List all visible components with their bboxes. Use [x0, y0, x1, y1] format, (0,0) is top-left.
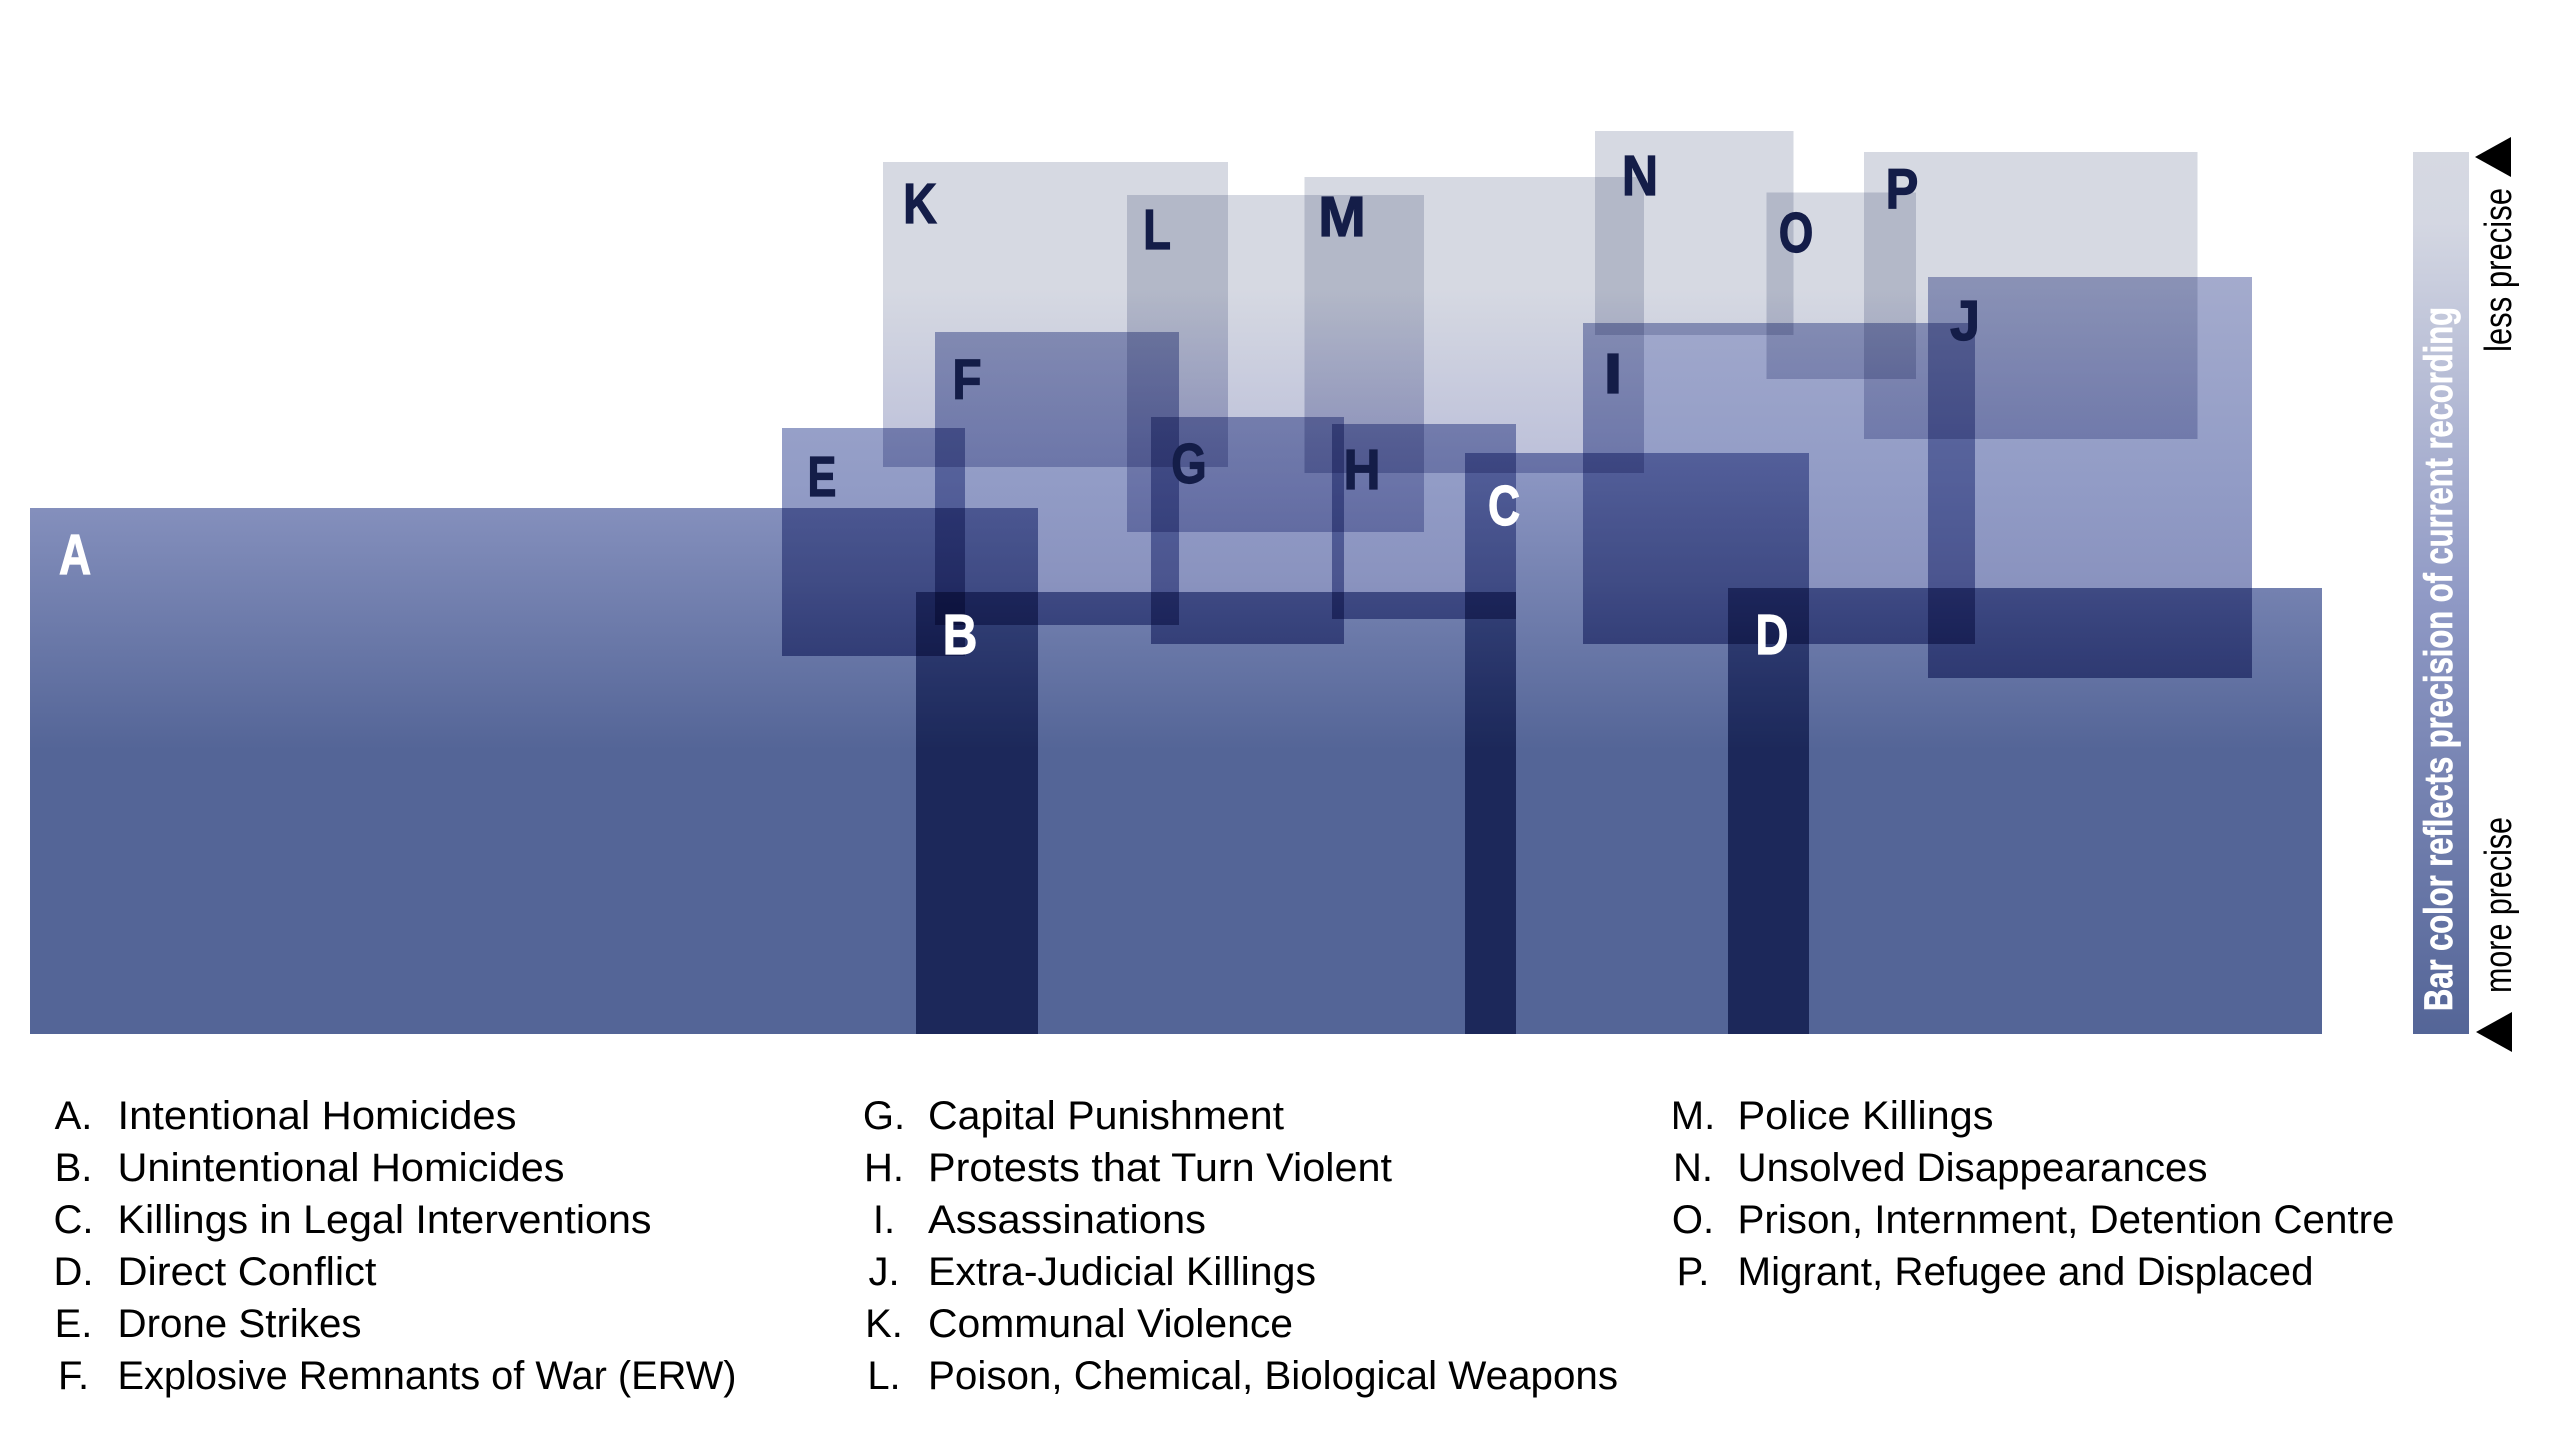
label C: C	[1488, 474, 1520, 537]
legend I: Assassinations	[928, 1198, 1206, 1242]
legend O: Prison, Internment, Detention Centre	[1738, 1198, 2394, 1242]
legend N: N.	[1673, 1146, 1713, 1190]
bar L: Poison, Chemical, Biological Weapons	[1127, 195, 1424, 532]
legend column 1	[54, 1094, 736, 1398]
bar F: Explosive Remnants of War	[935, 332, 1179, 625]
legend N: Unsolved Disappearances	[1738, 1146, 2208, 1190]
label L: L	[1143, 197, 1171, 261]
legend M: Police Killings	[1738, 1094, 1994, 1138]
legend B: Unintentional Homicides	[118, 1146, 564, 1190]
legend E: E.	[55, 1302, 92, 1346]
bar K: Communal Violence	[883, 162, 1228, 467]
legend P: Migrant, Refugee and Displaced	[1738, 1250, 2314, 1294]
legend F: F.	[58, 1354, 89, 1398]
legend F: Explosive Remnants of War (ERW)	[118, 1354, 736, 1398]
label O: O	[1779, 201, 1813, 264]
legend L: L.	[867, 1354, 901, 1398]
chart: overlapping bars	[30, 131, 2322, 1034]
legend C: Killings in Legal Interventions	[118, 1198, 652, 1242]
legend G: Capital Punishment	[928, 1094, 1284, 1138]
bar H: Protests that Turn Violent	[1332, 424, 1516, 619]
bar J: Extra-Judicial Killings	[1928, 277, 2252, 678]
more precise label: more precise	[2478, 817, 2520, 993]
label K: K	[903, 173, 937, 236]
bar O: Prison, Internment, Detention Centre	[1766, 192, 1916, 379]
legend D: D.	[54, 1250, 94, 1294]
legend M: M.	[1671, 1094, 1715, 1138]
legend C: C.	[54, 1198, 94, 1242]
legend J: Extra-Judicial Killings	[928, 1250, 1316, 1294]
legend column 3	[1671, 1094, 2394, 1294]
legend B: B.	[55, 1146, 92, 1190]
bar A: Intentional Homicides	[30, 508, 1038, 1034]
arrow: more precise	[2476, 1012, 2512, 1052]
legend G: G.	[863, 1094, 905, 1138]
legend L: Poison, Chemical, Biological Weapons	[928, 1354, 1618, 1398]
legend I: I.	[873, 1198, 895, 1242]
bar C: Killings in Legal Interventions	[1465, 453, 1809, 1034]
legend O: O.	[1672, 1198, 1714, 1242]
bar P: Migrant, Refugee and Displaced	[1864, 152, 2198, 439]
bar I: Assassinations	[1583, 323, 1975, 644]
legend H: Protests that Turn Violent	[928, 1146, 1392, 1190]
bar M: Police Killings	[1304, 177, 1644, 473]
label E: E	[808, 444, 836, 508]
bar letter labels	[59, 144, 1980, 667]
label J: J	[1950, 289, 1980, 352]
legend H: H.	[864, 1146, 904, 1190]
legend E: Drone Strikes	[118, 1302, 362, 1346]
bar D: Direct Conflict	[1728, 588, 2322, 1034]
legend column 2	[863, 1094, 1618, 1398]
arrow: less precise	[2475, 137, 2511, 177]
label F: F	[952, 348, 982, 412]
legend J: J.	[868, 1250, 900, 1294]
bar G: Capital Punishment	[1151, 417, 1344, 644]
label P: P	[1886, 158, 1918, 221]
less precise label: less precise	[2478, 188, 2520, 352]
legend A: A.	[55, 1094, 92, 1138]
colour key: precision scale	[2413, 137, 2520, 1052]
bar B: Unintentional Homicides	[916, 592, 1516, 1034]
label B: B	[943, 603, 977, 667]
legend D: Direct Conflict	[118, 1250, 376, 1294]
legend K: K.	[865, 1302, 903, 1346]
label M: M	[1318, 185, 1366, 249]
legend P: P.	[1677, 1250, 1709, 1294]
label H: H	[1343, 439, 1381, 502]
legend A: Intentional Homicides	[118, 1094, 516, 1138]
key bar caption: Bar color reflects precision of current recording	[2417, 307, 2461, 1011]
bar N: Unsolved Disappearances	[1595, 131, 1794, 335]
key gradient bar	[2413, 152, 2469, 1034]
label I: I	[1603, 342, 1623, 406]
legend K: Communal Violence	[928, 1302, 1293, 1346]
label N: N	[1622, 144, 1658, 208]
bar E: Drone Strikes	[782, 428, 965, 656]
label D: D	[1756, 602, 1788, 666]
label G: G	[1171, 431, 1207, 495]
label A: A	[59, 523, 91, 586]
